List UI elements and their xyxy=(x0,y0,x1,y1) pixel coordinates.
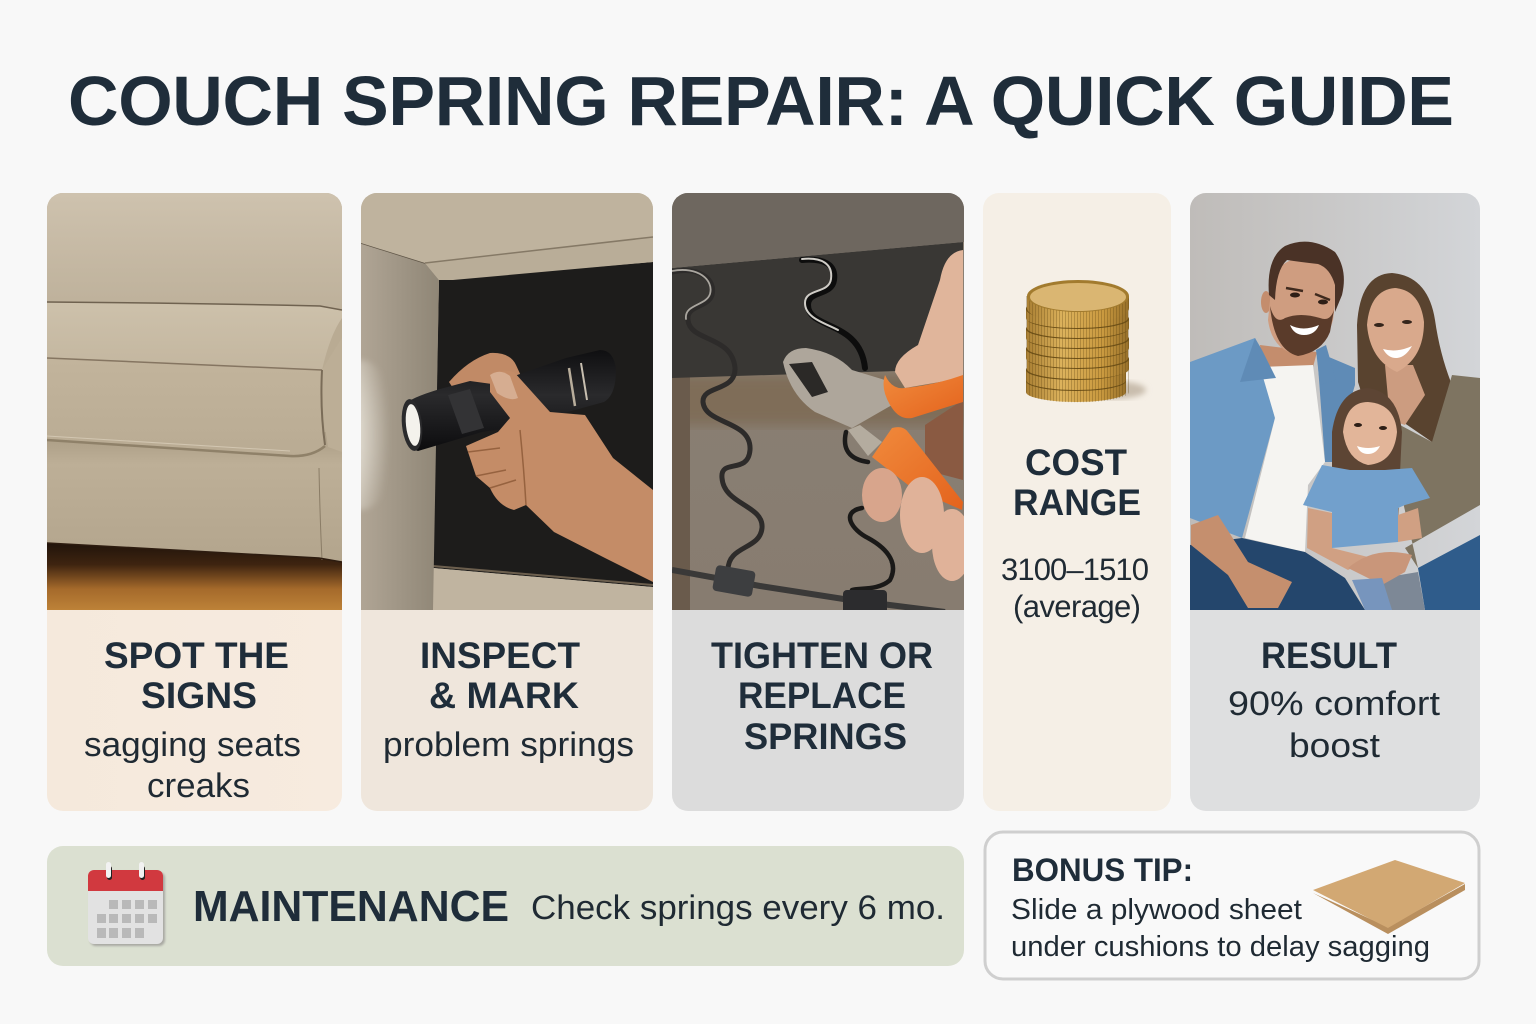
heading: inspect and mark xyxy=(420,635,580,716)
text: cost amount: 3100–1510 xyxy=(1001,552,1149,587)
thumb xyxy=(895,250,963,388)
label background: result xyxy=(1190,610,1480,811)
text: tip body: under cushions to delay sagging xyxy=(1011,931,1430,963)
heading: tighten or replace springs: TIGHTEN OR xyxy=(711,635,933,676)
panel: maintenance xyxy=(47,846,964,966)
text: comfort boost: 90% comfort xyxy=(1228,685,1441,723)
panel: cost range xyxy=(983,193,1171,811)
callout: bonus tip xyxy=(985,832,1479,979)
heading: tighten or replace springs xyxy=(711,635,933,757)
heading: cost range: RANGE xyxy=(1013,482,1141,523)
heading: spot the signs: SPOT THE xyxy=(104,635,289,676)
label background: tighten xyxy=(672,610,964,811)
heading: inspect and mark: & MARK xyxy=(429,675,579,716)
frame wire and clips xyxy=(672,570,945,612)
panel: inspect and mark xyxy=(361,193,653,811)
man xyxy=(1190,242,1365,610)
photo: flashlight under couch xyxy=(361,193,653,610)
text: cost amount: (average) xyxy=(1013,589,1141,624)
text: tip body: Slide a plywood sheet xyxy=(1011,894,1302,926)
title: COUCH SPRING REPAIR: A QUICK GUIDE xyxy=(68,62,1454,140)
pliers xyxy=(783,348,892,428)
text: comfort boost: boost xyxy=(1289,727,1381,765)
back finger xyxy=(449,352,520,386)
fingers behind xyxy=(925,400,963,480)
bar background: maintenance xyxy=(47,846,964,966)
text: cost amount xyxy=(1001,552,1149,624)
springs xyxy=(672,259,893,590)
heading: inspect and mark: INSPECT xyxy=(420,635,580,676)
panel: result xyxy=(1190,193,1480,811)
heading: cost range xyxy=(1013,442,1141,523)
text: tip body xyxy=(1011,894,1430,963)
heading: spot the signs xyxy=(104,635,289,716)
label background: inspect xyxy=(361,610,653,811)
callout box xyxy=(985,832,1479,979)
photo: pliers on springs xyxy=(672,193,972,616)
text: symptoms xyxy=(84,726,301,805)
icon: plywood sheet xyxy=(1313,860,1465,934)
girl xyxy=(1303,388,1430,610)
label background: spot the signs xyxy=(47,610,342,811)
heading: tighten or replace springs: SPRINGS xyxy=(744,716,907,757)
flashlight xyxy=(399,350,616,452)
heading: spot the signs: SIGNS xyxy=(141,675,257,716)
fingers xyxy=(862,468,902,522)
icon: calendar xyxy=(88,862,165,946)
woman xyxy=(1357,273,1480,610)
heading: result: RESULT xyxy=(1261,635,1397,676)
text: problem springs: problem springs xyxy=(383,726,634,764)
card background: cost xyxy=(983,193,1171,811)
text: check springs: Check springs every 6 mo. xyxy=(531,889,945,927)
icon: coin stack xyxy=(1026,280,1146,402)
panel: tighten or replace springs xyxy=(672,193,972,811)
text: symptoms: creaks xyxy=(147,767,250,805)
photo: happy family on couch xyxy=(1190,193,1480,610)
heading: maintenance: MAINTENANCE xyxy=(193,882,509,931)
hand xyxy=(466,371,653,582)
heading: bonus tip: BONUS TIP: xyxy=(1012,852,1193,888)
text: symptoms: sagging seats xyxy=(84,726,301,764)
photo: beige couch cushion xyxy=(47,193,342,610)
heading: cost range: COST xyxy=(1025,442,1127,483)
panel: spot the signs xyxy=(47,193,342,811)
text: comfort boost xyxy=(1228,685,1441,765)
heading: tighten or replace springs: REPLACE xyxy=(738,675,906,716)
